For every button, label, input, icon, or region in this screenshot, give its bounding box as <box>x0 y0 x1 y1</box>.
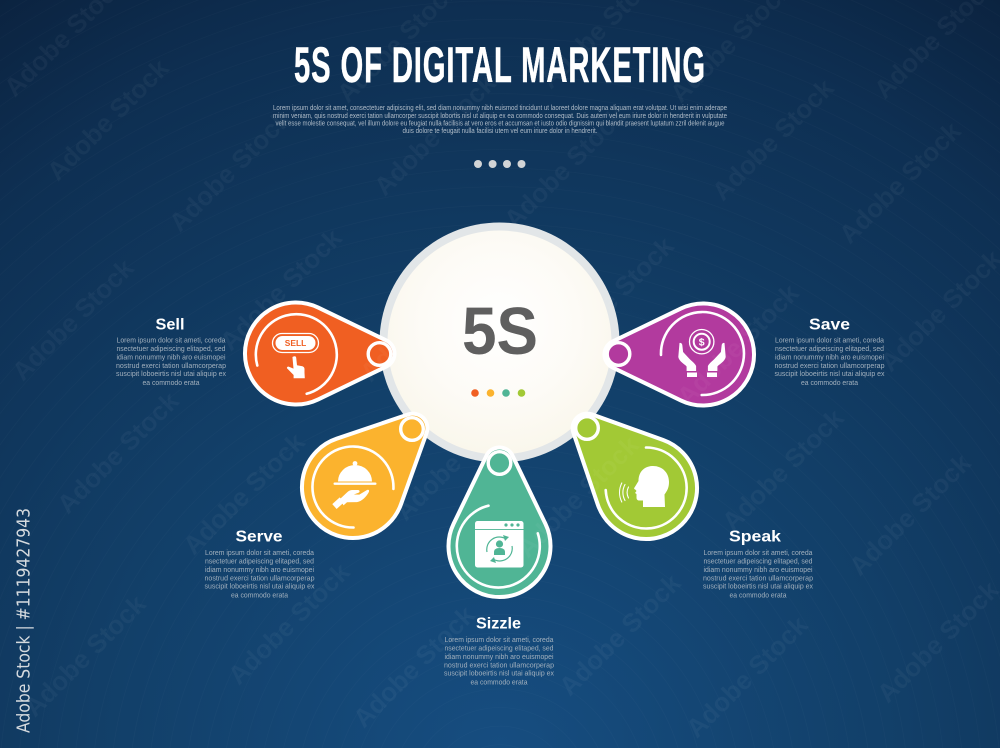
text block: Sell: idiam nonummy nibh aro euismopei <box>116 352 226 361</box>
icon: speaking head <box>620 466 669 507</box>
watermarks: Adobe Stock <box>706 72 840 206</box>
icon: hands holding coin: $ <box>699 336 705 348</box>
watermarks: Adobe Stock <box>51 385 185 519</box>
text block: Sell: nsectetuer adipeiscing elitaped, sed <box>116 344 226 353</box>
watermarks: Adobe Stock <box>354 253 488 387</box>
text block: Save: nostrud exerci tation ullamcorperap <box>774 361 884 370</box>
text block: Speak: idiam nonummy nibh aro euismopei <box>704 565 813 574</box>
watermarks: Adobe Stock <box>347 599 481 733</box>
text block: Save: nsectetuer adipeiscing elitaped, sed <box>775 344 884 353</box>
text block: Sizzle: Sizzle <box>476 616 521 632</box>
side credit: Adobe Stock | #1119427943 <box>14 508 34 733</box>
watermarks: Adobe Stock <box>389 392 523 526</box>
intro paragraph: velit esse molestie consequat, vel illum dolore eu feugiat nulla facilisis at vero eros et accumsan et iusto odio dignissim qui blandit praesent luptatum zzril delenit augue <box>276 120 725 128</box>
icon: hands holding coin <box>678 330 726 377</box>
text block: Sell: nostrud exerci tation ullamcorperap <box>116 361 226 370</box>
intro paragraph: duis dolore te feugait nulla facilisi utem vel eum iriure dolor in hendrerit. <box>402 128 598 135</box>
text block: Save: Lorem ipsum dolor sit ameti, coreda <box>775 336 885 344</box>
watermarks: Adobe Stock <box>843 447 977 581</box>
watermarks: Adobe Stock <box>163 103 297 237</box>
text block: Speak: Speak <box>729 528 781 546</box>
text block: Speak: Lorem ipsum dolor sit ameti, coreda <box>704 548 813 557</box>
icon: cloche on hand <box>332 461 376 509</box>
text block: Speak: ea commodo erata <box>730 590 787 599</box>
text block: Sizzle: nsectetuer adipeiscing elitaped, sed <box>444 644 554 652</box>
text block: Sizzle <box>444 616 554 686</box>
text block: Save: suscipit loboeirtis nisl utai aliquip ex <box>774 369 885 378</box>
watermarks: Adobe Stock <box>214 222 348 356</box>
text block: Speak <box>703 528 813 599</box>
text block: Serve: Lorem ipsum dolor sit ameti, coreda <box>205 548 315 557</box>
watermarks: Adobe Stock <box>833 115 967 249</box>
text block: Save: ea commodo erata <box>801 378 859 387</box>
text block: Sizzle: ea commodo erata <box>470 677 528 686</box>
text block: Sizzle: suscipit loboeirtis nisl utai aliquip ex <box>444 669 554 678</box>
watermarks: Adobe Stock <box>511 429 645 563</box>
watermarks: Adobe Stock <box>498 100 632 234</box>
teardrop: Save <box>604 304 754 406</box>
watermarks: Adobe Stock <box>368 67 502 201</box>
watermarks: Adobe Stock <box>671 277 805 411</box>
text block: Speak: suscipit loboeirtis nisl utai aliquip ex <box>703 582 813 591</box>
watermarks: Adobe Stock <box>716 402 850 536</box>
text block: Speak: nsectetuer adipeiscing elitaped, sed <box>704 556 812 566</box>
teardrop: Serve <box>281 382 459 559</box>
text block: Save: Save <box>809 316 850 334</box>
text block: Sell: ea commodo erata <box>142 378 200 387</box>
teardrop: Speak <box>541 382 718 560</box>
text block: Save <box>774 316 885 387</box>
text block: Serve: nsectetuer adipeiscing elitaped, sed <box>205 556 314 566</box>
watermarks: Adobe Stock <box>680 609 814 743</box>
text block: Sell <box>116 316 226 387</box>
watermarks: Adobe Stock <box>41 52 175 186</box>
text block: Speak: nostrud exerci tation ullamcorperap <box>703 573 813 582</box>
title: 5S OF DIGITAL MARKETING <box>294 37 706 93</box>
watermarks: Adobe Stock <box>553 567 687 701</box>
teardrop: Sell <box>245 302 395 404</box>
text block: Sizzle: nostrud exerci tation ullamcorperap <box>444 660 554 669</box>
text block: Sell: Sell <box>156 316 184 334</box>
text block: Serve: nostrud exerci tation ullamcorperap <box>204 573 314 582</box>
text block: Save: idiam nonummy nibh aro euismopei <box>775 352 884 361</box>
watermarks: Adobe Stock <box>6 252 140 386</box>
central circle <box>380 222 620 462</box>
watermarks: Adobe Stock <box>18 588 152 722</box>
watermarks: Adobe Stock <box>546 230 680 364</box>
watermarks: Adobe Stock <box>222 556 356 690</box>
text block: Sizzle: idiam nonummy nibh aro euismopei <box>444 652 554 661</box>
intro paragraph: minim veniam, quis nostrud exerci tation ullamcorper suscipit lobortis nisl ut aliquip ex ea commodo consequat. Duis autem vel eum iriure dolor in hendrerit in vulputate <box>273 113 727 120</box>
central colour dots <box>471 389 525 397</box>
text block: Sizzle: Lorem ipsum dolor sit ameti, coreda <box>444 635 554 644</box>
teardrop: Sizzle <box>448 447 550 597</box>
icon: sell button <box>272 334 318 378</box>
text block: Serve <box>204 528 315 599</box>
watermarks: Adobe Stock <box>177 426 311 560</box>
central label: 5S <box>462 294 538 369</box>
icon: browser window with person <box>475 521 524 568</box>
text block: Serve: suscipit loboeirtis nisl utai aliquip ex <box>204 582 315 591</box>
text block: Serve: ea commodo erata <box>231 590 289 599</box>
text block: Sell: Lorem ipsum dolor sit ameti, coreda <box>116 336 226 344</box>
text block: Serve: idiam nonummy nibh aro euismopei <box>205 565 314 574</box>
text block: Serve: Serve <box>236 528 283 546</box>
icon: sell button: SELL <box>285 338 306 348</box>
header dots <box>474 160 526 168</box>
text block: Sell: suscipit loboeirtis nisl utai aliquip ex <box>116 369 226 378</box>
intro paragraph <box>273 105 727 135</box>
intro paragraph: Lorem ipsum dolor sit amet, consectetuer adipiscing elit, sed diam nonummy nibh euismod tincidunt ut laoreet dolore magna aliquam erat volutpat. Ut wisi enim aderape <box>273 105 727 112</box>
